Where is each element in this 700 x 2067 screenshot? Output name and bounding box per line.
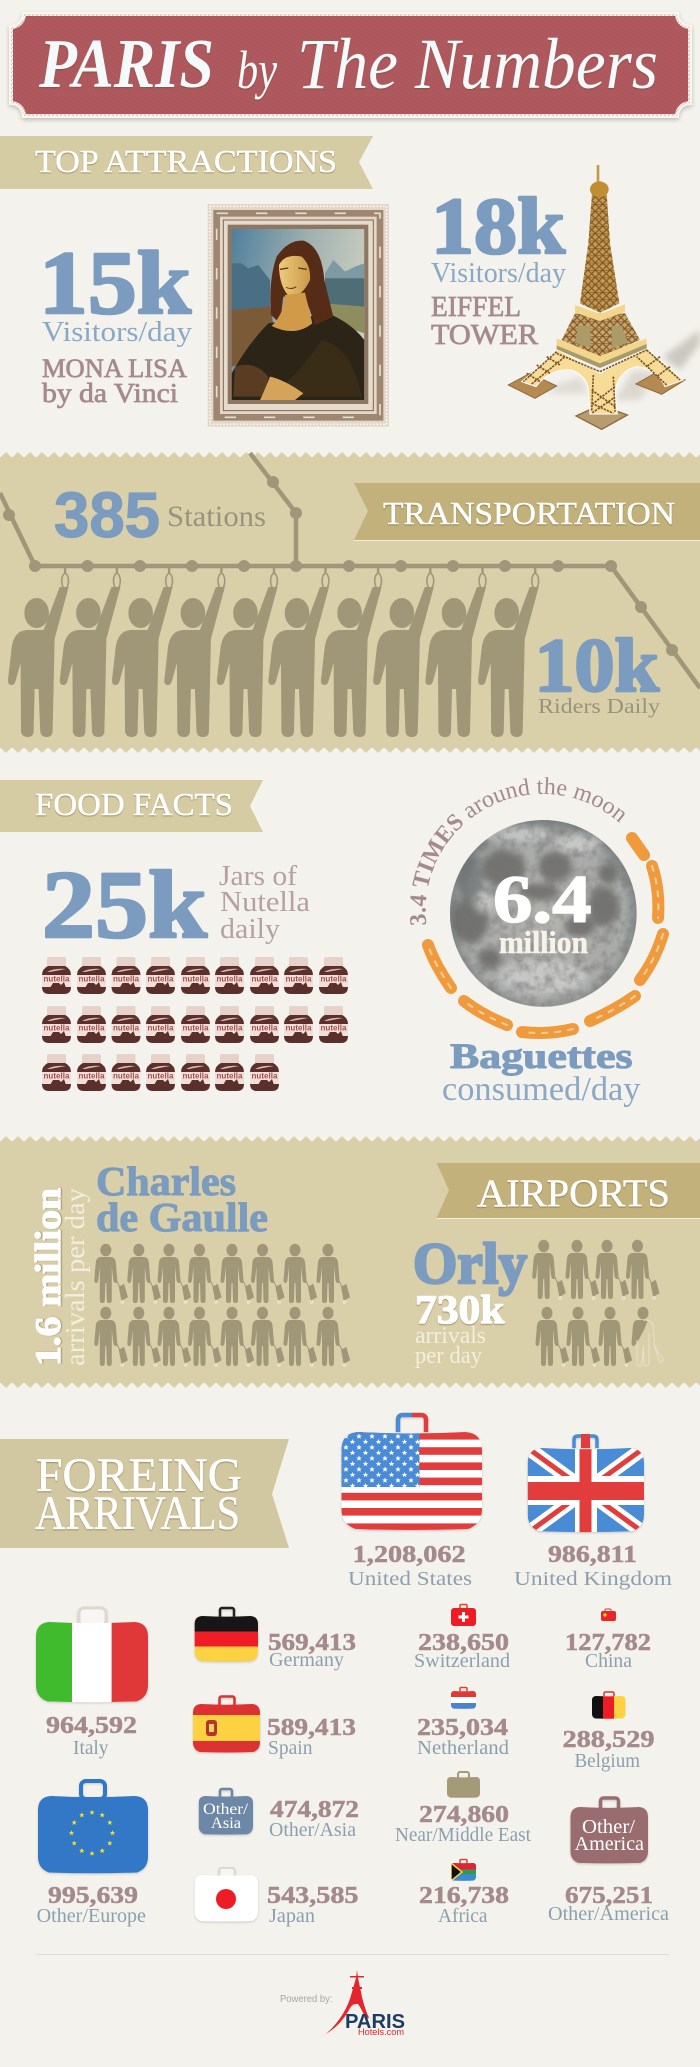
heading: airports ribbon [437,1163,700,1219]
heading: foreing arrivals ribbon: FOREING [36,1449,242,1502]
stat: Other/Europe arrivals: Other/Europe [37,1905,146,1927]
stat: Mona Lisa visitors: Visitors/day [42,316,193,348]
stat: 25k jars of Nutella: Nutella [220,887,311,918]
title banner: by [237,40,277,100]
stat: 25k jars of Nutella [42,851,311,958]
suitcase: Other/Europe [38,1781,148,1874]
suitcase: United States [342,1415,482,1531]
stat: Spain arrivals: Spain [268,1737,312,1759]
panel: airports [0,1136,700,1388]
stat: Belgium arrivals: Belgium [574,1750,640,1772]
stat: Eiffel Tower visitors: TOWER [431,319,539,351]
stat: 385 stations [54,479,266,551]
stat: Italy arrivals [46,1713,137,1759]
stat: Italy arrivals: 964,592 [46,1713,137,1739]
stat: Africa arrivals [419,1883,509,1927]
tan zigzag band background [0,1136,700,1388]
stat: baguettes consumed per day: consumed/day [442,1071,640,1108]
title banner: PARIS [38,26,214,103]
stat: Eiffel Tower visitors: 18k [431,183,566,271]
stat: 1.6 million arrivals (rotated): arrivals per day [60,1187,90,1366]
stat: Other/Asia arrivals [269,1797,359,1841]
suitcase: Other/America: Other/ [582,1816,635,1838]
stat: Belgium arrivals [562,1727,654,1772]
stat: 10k riders daily: 10k [534,624,660,708]
footer: powered by Paris Hotels logo: Powered by: [280,1993,332,2005]
stat: Orly 730k arrivals: per day [415,1343,482,1369]
stat: 6.4 million [493,861,592,960]
stat: baguettes consumed per day: Baguettes [450,1036,632,1076]
stat: 6.4 million: 6.4 [493,861,592,937]
stat: Germany arrivals: 569,413 [268,1630,356,1656]
heading: food facts ribbon: FOOD FACTS [35,786,233,822]
stat: 385 stations: 385 [54,479,160,551]
stat: United Kingdom arrivals [514,1542,673,1590]
stat: Other/America arrivals [548,1883,669,1925]
suitcase: Other/Asia [199,1789,253,1835]
stat: 1.6 million arrivals (rotated): 1.6 million [28,1188,68,1366]
title banner: The Numbers [297,24,658,104]
airport name: Charles de Gaulle: de Gaulle [96,1194,268,1240]
suitcase: Italy [36,1608,148,1703]
stat: Italy arrivals: Italy [73,1737,108,1759]
stat: 25k jars of Nutella: 25k [42,851,208,958]
stat: Switzerland arrivals: 238,650 [418,1630,509,1656]
stat: United States arrivals [348,1542,472,1590]
suitcase: Spain [193,1696,260,1753]
ring of baguettes [428,838,663,1033]
logo wordmark: PARIS [345,2011,405,2033]
suitcase: China [601,1609,616,1621]
heading: top attractions ribbon [0,136,373,189]
stat: Eiffel Tower visitors: EIFFEL [431,291,521,323]
stat: Switzerland arrivals [414,1630,510,1672]
heading: foreing arrivals ribbon: ARRIVALS [35,1487,240,1540]
metro line map [0,453,700,688]
title banner [11,14,690,116]
stat: baguettes consumed per day [442,1036,640,1108]
stat: Orly 730k arrivals: Orly [413,1231,527,1296]
stat: Orly 730k arrivals [413,1231,527,1369]
arc text: times around the moon: 3.4 TIMES around the moon [410,777,625,925]
traveller pictograms: Orly [532,1240,664,1366]
stat: United States arrivals: United States [348,1568,472,1590]
stat: Other/Europe arrivals: 995,639 [48,1883,138,1909]
stat: Eiffel Tower visitors: Visitors/day [431,257,566,289]
image: framed Mona Lisa painting [208,204,389,427]
stat: Japan arrivals: 543,585 [267,1883,358,1909]
stat: Orly 730k arrivals: arrivals [415,1323,486,1349]
suitcase: Other/Asia: Asia [211,1815,241,1832]
stat: Mona Lisa visitors: by da Vinci [42,378,178,408]
stat: Other/Europe arrivals [37,1883,146,1927]
stat: Germany arrivals [268,1630,356,1671]
stat: 1.6 million arrivals (rotated) [28,1187,90,1366]
stat: Other/America arrivals: Other/America [548,1903,669,1925]
stat: United Kingdom arrivals: 986,811 [548,1542,637,1568]
logo wordmark: Hotels.com [358,2027,404,2037]
footer: powered by Paris Hotels logo [280,1970,405,2037]
traveller pictograms: Charles de Gaulle [94,1244,350,1366]
stat: Switzerland arrivals: Switzerland [414,1650,510,1672]
stat: Near/Middle East arrivals: 274,860 [419,1802,509,1828]
stat: Africa arrivals: 216,738 [419,1883,509,1909]
stat: Japan arrivals: Japan [269,1905,315,1927]
stat: Belgium arrivals: 288,529 [562,1727,654,1753]
stat: Mona Lisa visitors: 15k [39,234,191,333]
heading: foreing arrivals ribbon [0,1439,289,1548]
jar pictogram grid [42,957,348,1091]
stat: Africa arrivals: Africa [438,1905,488,1927]
stat: Spain arrivals [267,1715,356,1759]
heading: top attractions ribbon: TOP ATTRACTIONS [35,143,337,179]
image: moon [450,820,637,1007]
stat: 25k jars of Nutella: Jars of [219,861,298,892]
suitcase: United Kingdom [528,1434,644,1533]
heading: transportation ribbon [354,483,700,541]
stat: Netherland arrivals: Netherland [417,1737,509,1759]
stat: Japan arrivals [267,1883,358,1927]
suitcase: Netherland [451,1688,476,1709]
stat: Germany arrivals: Germany [269,1649,344,1671]
stat: Mona Lisa visitors: MONA LISA [42,354,187,383]
stat: 385 stations: Stations [167,500,266,533]
stat: Netherland arrivals [417,1715,509,1759]
stat: Other/Asia arrivals: 474,872 [270,1797,359,1823]
suitcase: Switzerland [451,1604,476,1626]
suitcase: Belgium [592,1692,626,1719]
stat: United States arrivals: 1,208,062 [353,1542,466,1568]
stat: United Kingdom arrivals: United Kingdom [514,1568,673,1590]
heading: food facts ribbon [0,780,263,832]
suitcase: Other/Asia: Other/ [203,1801,249,1818]
tan zigzag band background [0,452,700,753]
stat: 10k riders daily: Riders Daily [538,694,661,718]
icon: Eiffel Tower [508,165,700,429]
riders hanging from straps [8,566,539,737]
heading: transportation ribbon: TRANSPORTATION [383,495,675,531]
stat: Netherland arrivals: 235,034 [417,1715,508,1741]
stat: Eiffel Tower visitors [431,183,566,351]
heading: airports ribbon: AIRPORTS [477,1172,670,1215]
stat: Spain arrivals: 589,413 [267,1715,356,1741]
stat: Orly 730k arrivals: 730k [415,1287,505,1332]
stat: 6.4 million: million [499,924,588,960]
stat: China arrivals: China [585,1650,632,1672]
suitcase: Near/Middle East [447,1772,480,1798]
airport name: Charles de Gaulle [96,1158,268,1240]
panel: foreign arrivals [0,1415,673,1927]
stat: China arrivals: 127,782 [565,1630,651,1656]
stat: 25k jars of Nutella: daily [220,914,280,945]
panel: food facts [0,777,669,1108]
suitcase: Germany [195,1608,258,1662]
stat: Other/Asia arrivals: Other/Asia [269,1819,356,1841]
suitcase: Africa [451,1860,476,1881]
suitcase: Other/America: America [574,1833,644,1855]
stat: Other/America arrivals: 675,251 [565,1883,653,1909]
airport name: Charles de Gaulle: Charles [96,1158,236,1204]
suitcase: Other/America [570,1798,648,1864]
stat: Mona Lisa visitors [39,234,193,408]
stat: China arrivals [565,1630,651,1672]
panel: top attractions [0,136,700,429]
panel: transportation [0,452,700,753]
stat: Near/Middle East arrivals [395,1802,531,1846]
suitcase: Japan [195,1868,258,1922]
icon: red Eiffel logo [326,1970,369,2034]
stat: Near/Middle East arrivals: Near/Middle East [395,1824,531,1846]
